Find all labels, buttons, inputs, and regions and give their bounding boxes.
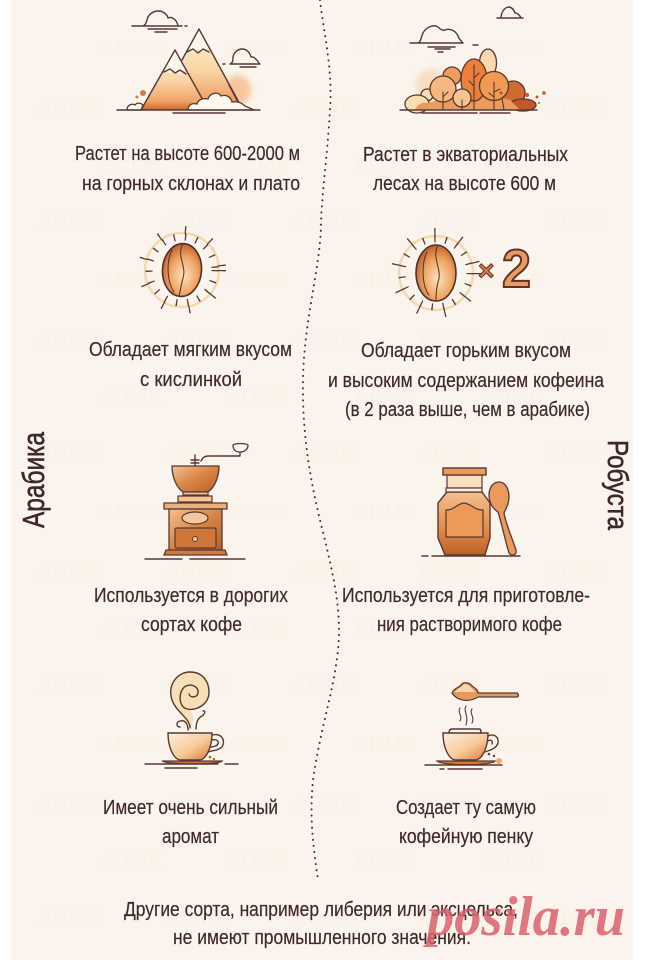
- icon: multiply by two: 2: [502, 239, 531, 299]
- text: height arabica: Растет на высоте 600-2000 м: [75, 142, 300, 165]
- icon: cup with foam and spoon: [425, 683, 518, 769]
- text: usage robusta: ния растворимого кофе: [377, 613, 562, 636]
- posila.ru watermark: posila.ru: [423, 886, 625, 948]
- icon: arabica coffee bean with rays: [142, 230, 222, 310]
- text: taste robusta: [328, 339, 605, 421]
- text: taste robusta: Обладает горьким вкусом: [361, 339, 571, 362]
- text: height robusta: [363, 143, 569, 195]
- text: taste arabica: с кислинкой: [140, 368, 242, 391]
- text: aroma arabica: Имеет очень сильный: [103, 796, 278, 819]
- text: height robusta: Растет в экваториальных: [363, 143, 569, 166]
- footer note: [124, 898, 518, 949]
- text: usage robusta: [342, 584, 590, 636]
- text: aroma arabica: [103, 796, 278, 848]
- text: taste robusta: (в 2 раза выше, чем в арабике): [345, 398, 590, 421]
- text: foam robusta: Создает ту самую: [396, 796, 536, 819]
- text: usage arabica: Используется в дорогих: [94, 584, 289, 607]
- vertical label: Робуста: Робуста: [601, 440, 633, 531]
- icon: jar with spoon: [422, 468, 520, 556]
- text: usage arabica: сортах кофе: [141, 613, 242, 636]
- icon: forest with clouds: [400, 7, 546, 113]
- text: taste arabica: Обладает мягким вкусом: [89, 338, 292, 361]
- text: height arabica: [75, 142, 300, 195]
- text: usage arabica: [94, 584, 289, 636]
- text: foam robusta: кофейную пенку: [399, 825, 534, 848]
- icon: coffee grinder: [145, 444, 248, 559]
- icon: multiply by two: ×: [478, 255, 494, 286]
- text: taste robusta: и высоким содержанием кофеина: [328, 369, 605, 392]
- footer note: Другие сорта, например либерия или эксцельса,: [124, 898, 518, 921]
- text: usage robusta: Используется для приготовле-: [342, 584, 590, 607]
- footer note: не имеют промышленного значения.: [173, 926, 471, 949]
- text: height arabica: на горных склонах и плато: [82, 172, 300, 195]
- icon: cup with aroma swirl: [145, 672, 238, 768]
- icon: robusta coffee bean with rays: [395, 232, 477, 314]
- text: taste arabica: [89, 338, 292, 391]
- icon: mountains with clouds: [117, 11, 260, 113]
- dotted central divider: [303, 0, 339, 880]
- icon: multiply by two: [478, 239, 531, 299]
- text: aroma arabica: аромат: [162, 825, 220, 848]
- text: foam robusta: [396, 796, 536, 848]
- vertical label: Арабика: Арабика: [16, 431, 51, 528]
- text: height robusta: лесах на высоте 600 м: [373, 172, 556, 195]
